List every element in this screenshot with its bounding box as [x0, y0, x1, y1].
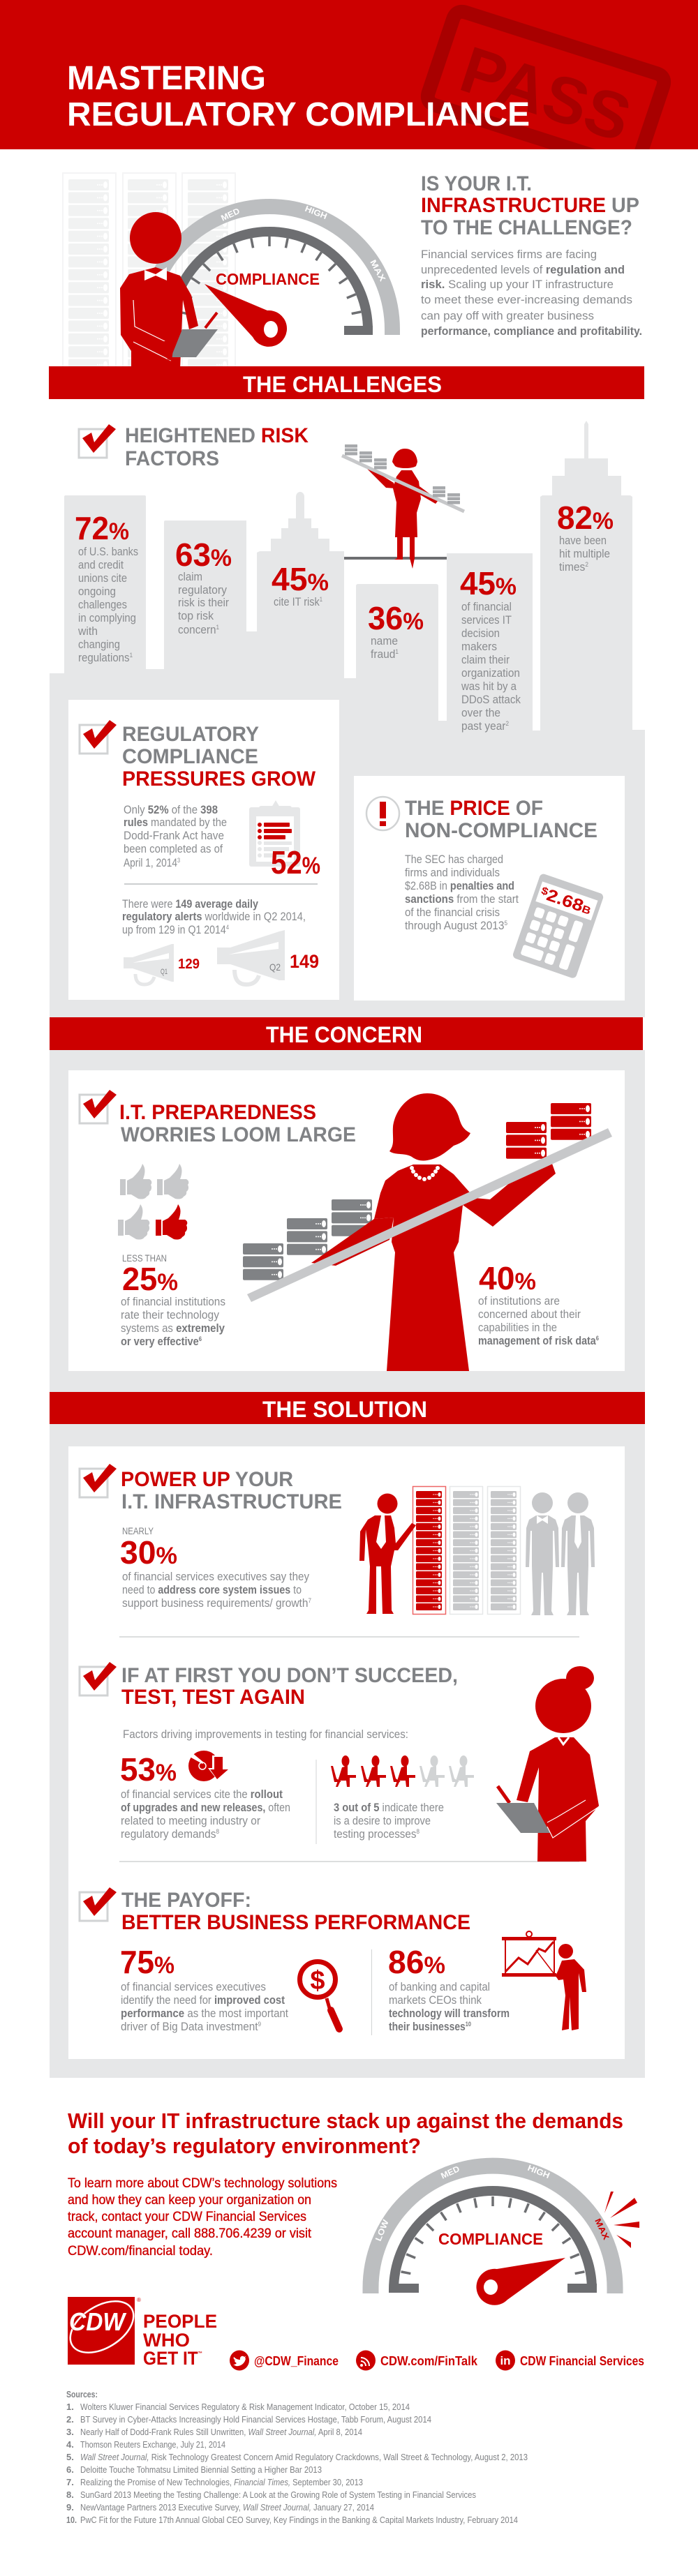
call to action text: account manager, call 888.706.4239 or visit: [68, 2226, 312, 2241]
icon: exclamation: [366, 797, 399, 830]
stat: 52 percent: 52%: [271, 844, 320, 881]
stat: 82 percent: 2: [585, 561, 588, 568]
sources: Wolters Kluwer Financial Services Regulatory & Risk Management Indicator, October 15, 2014: [80, 2402, 410, 2412]
call to action heading: Will your IT infrastructure stack up against the demands: [68, 2109, 623, 2133]
stat: 45 percent DDoS: past year: [461, 719, 510, 733]
heading: IT preparedness: WORRIES LOOM LARGE: [121, 1123, 356, 1146]
heading: the price of non-compliance: THE PRICE OF: [405, 797, 543, 820]
text: dodd-frank rules: [124, 803, 227, 869]
stat: 129: 129: [178, 957, 200, 972]
stat: 86 percent: technology will transform: [389, 2007, 510, 2020]
tagline: [143, 2311, 217, 2369]
stat: 75 percent: 75%: [120, 1944, 174, 1980]
text: SEC charges: The SEC has charged: [405, 853, 503, 866]
panel: solution: [50, 1424, 645, 2078]
sources: 9.: [66, 2502, 74, 2513]
heading: the payoff: BETTER BUSINESS PERFORMANCE: [121, 1911, 470, 1934]
illustration: man pointing at server racks: [359, 1486, 595, 1615]
stat: 45 percent DDoS: 2: [505, 720, 509, 727]
compliance gauge: HIGH: [304, 204, 329, 221]
text: SEC charges: 5: [504, 920, 507, 927]
stat: 86 percent: of banking and capital: [389, 1980, 490, 1993]
faded server racks: [63, 173, 235, 375]
heading: heightened risk factors: [125, 424, 309, 470]
sources: Sources:: [66, 2389, 98, 2399]
title: MASTERING: [67, 60, 266, 97]
intro heading: IS YOUR I.T.: [421, 172, 532, 195]
stat: 75 percent: of financial services executives: [121, 1980, 266, 1993]
social: LinkedIn: CDW Financial Services: [520, 2354, 644, 2368]
stat: 40 percent: management of risk data: [478, 1334, 618, 1347]
stat: 53 percent: regulatory demands: [121, 1827, 225, 1841]
icon: magnifying glass with dollar: [300, 1962, 339, 2029]
panel: price of non-compliance: [354, 776, 625, 1001]
stat: 63 percent: [175, 537, 232, 636]
stat: 40 percent: capabilities in the: [478, 1321, 557, 1334]
icon: checkbox testing: [80, 1662, 117, 1695]
stat: 63 percent: claim: [178, 570, 202, 583]
text: dodd-frank rules: 3: [177, 857, 180, 864]
stat: 72 percent: and credit: [78, 558, 124, 571]
social: twitter: @CDW_Finance: [254, 2354, 339, 2368]
stat: 45 percent DDoS: of financial: [461, 600, 512, 613]
text: 3 out of 5: 8: [417, 1828, 419, 1835]
stat: 63 percent: regulatory: [178, 583, 227, 597]
stat: 72 percent: challenges: [78, 598, 127, 611]
tagline: PEOPLE: [143, 2311, 217, 2332]
heading: if at first you don't succeed: TEST, TEST AGAIN: [121, 1686, 305, 1709]
stat: 82 percent: 82%: [557, 500, 614, 536]
tagline: GET IT: [143, 2348, 204, 2369]
woman with clipboard: [496, 1666, 600, 1862]
text: SEC charges: through August 2013: [405, 919, 514, 932]
text: dodd-frank rules: April 1, 2014: [124, 856, 190, 869]
stat: 53 percent: 8: [216, 1828, 219, 1835]
heading: the payoff: [121, 1889, 470, 1934]
sources: 1.: [66, 2402, 74, 2412]
heading: if at first you don't succeed: IF AT FIRST YOU DON’T SUCCEED,: [121, 1664, 458, 1687]
stat: 40 percent: of institutions are: [478, 1294, 560, 1308]
sources: 3.: [66, 2427, 74, 2437]
woman balancing servers: [243, 1093, 612, 1371]
stat: 82 percent: [557, 500, 614, 574]
compliance gauge at max: MED: [439, 2164, 461, 2181]
icon: magnifying glass with dollar: $: [310, 1966, 325, 1995]
stat: 75 percent: performance as the most important: [121, 2007, 288, 2020]
heading: power up your IT infrastructure: [121, 1468, 342, 1513]
CDW logo: CDW: [69, 2307, 127, 2336]
stat: 72 percent: of U.S. banks: [78, 545, 138, 558]
city skyline background: [50, 421, 645, 1017]
sources: [66, 2389, 528, 2525]
call to action text: and how they can keep your organization on: [68, 2193, 311, 2208]
intro paragraph: risk. Scaling up your IT infrastructure: [421, 278, 614, 291]
sources: Deloitte Touche Tohmatsu Limited Biennial Setting a Higher Bar 2013: [80, 2464, 322, 2475]
stat: 82 percent: times: [559, 560, 588, 574]
sources: 6.: [66, 2464, 74, 2475]
heading: regulatory compliance pressures grow: REGULATORY: [122, 723, 259, 746]
stat: 40 percent: 40%: [479, 1260, 536, 1296]
stat: 75 percent: [120, 1944, 288, 2033]
heading: the price of non-compliance: [405, 797, 597, 842]
stat: 72 percent: regulations: [78, 651, 136, 664]
call to action text: [68, 2176, 337, 2259]
band: the challenges: [49, 366, 644, 399]
text: regulatory alerts: 4: [226, 924, 229, 931]
sources: 4.: [66, 2439, 74, 2450]
stat: 53 percent: of financial services cite the rollout: [121, 1788, 283, 1801]
stat: 72 percent: in complying: [78, 611, 136, 624]
compliance gauge: COMPLIANCE: [216, 270, 320, 288]
text: dodd-frank rules: Dodd-Frank Act have: [124, 829, 224, 842]
text: 3 out of 5: [334, 1801, 444, 1841]
sources: 7.: [66, 2477, 74, 2487]
social: RSS: CDW.com/FinTalk: [380, 2354, 478, 2368]
sources: BT Survey in Cyber-Attacks Increasingly Hold Financial Services Hostage, Tabb Forum, August 2014: [80, 2414, 431, 2425]
stat: 72 percent: unions cite: [78, 571, 127, 585]
compliance gauge: [147, 204, 392, 347]
stat: 45 percent IT risk: 1: [320, 596, 322, 603]
social: twitter: [230, 2350, 339, 2371]
call to action text: track, contact your CDW Financial Services: [68, 2210, 306, 2224]
stat: 72 percent: [75, 510, 138, 664]
call to action text: CDW.com/financial today.: [68, 2244, 213, 2259]
intro heading line 2: INFRASTRUCTURE UP: [421, 194, 639, 217]
stat: 82 percent: hit multiple: [559, 547, 610, 560]
header banner: [0, 0, 698, 149]
sources: Wall Street Journal, Risk Technology Greatest Concern Amid Regulatory Crackdowns, Wall Street & Technology, August 2, 2013: [80, 2452, 528, 2462]
call to action heading: [68, 2109, 623, 2158]
social: LinkedIn: [496, 2350, 644, 2371]
text: SEC charges: sanctions from the start: [405, 892, 519, 906]
text: regulatory alerts: up from 129 in Q1 2014: [122, 923, 247, 936]
band: the concern: THE CONCERN: [266, 1022, 422, 1047]
tagline: WHO: [143, 2330, 190, 2351]
sources: 10.: [66, 2515, 77, 2525]
stat: 86 percent: 86%: [388, 1944, 445, 1980]
stat: less than 25 percent: rate their technology: [121, 1308, 219, 1321]
icon: calculator with $2.68B: B: [580, 903, 593, 918]
stat: 86 percent: markets CEOs think: [389, 1993, 482, 2007]
tightrope woman balancing servers: [342, 444, 464, 569]
text: SEC charges: $2.68B in penalties and: [405, 879, 514, 892]
text: regulatory alerts: regulatory alerts worldwide in Q2 2014,: [122, 910, 306, 923]
stat: 149: 149: [290, 951, 319, 972]
stat: less than 25 percent: of financial institutions: [121, 1295, 225, 1308]
stat: nearly 30 percent: NEARLY: [122, 1525, 154, 1536]
intro paragraph: to meet these ever-increasing demands: [421, 293, 632, 306]
icon: megaphone Q2: [217, 930, 285, 984]
stat: 75 percent: driver of Big Data investment: [121, 2020, 273, 2033]
heading: heightened risk factors: FACTORS: [125, 447, 219, 470]
stat: 53 percent: 53%: [120, 1751, 177, 1788]
stat: less than 25 percent: 25%: [122, 1261, 178, 1297]
text: regulatory alerts: There were 149 average daily: [122, 897, 258, 911]
band: the challenges: THE CHALLENGES: [243, 372, 442, 397]
sources: NewVantage Partners 2013 Executive Survey, Wall Street Journal, January 27, 2014: [80, 2502, 374, 2513]
social: LinkedIn: in: [500, 2354, 511, 2367]
text: factors: Factors driving improvements in testing for financial services:: [123, 1728, 408, 1741]
stat: nearly 30 percent: need to address core system issues to: [122, 1583, 302, 1596]
stat: 45 percent DDoS: [460, 565, 521, 733]
stat: 72 percent: with: [77, 624, 98, 638]
sources: Realizing the Promise of New Technologies, Financial Times, September 30, 2013: [80, 2477, 363, 2487]
PASS stamp: [428, 12, 664, 167]
icon: checkbox regulatory: [80, 720, 117, 754]
stat: 45 percent DDoS: over the: [461, 706, 500, 719]
intro paragraph: performance, compliance and profitability.: [421, 324, 642, 338]
stat: 45 percent DDoS: 45%: [460, 565, 517, 601]
stat: 45 percent DDoS: services IT: [461, 613, 512, 627]
icon: thumbs up ratings: [118, 1164, 188, 1240]
stat: 36 percent: [368, 600, 424, 661]
heading: heightened risk factors: HEIGHTENED RISK: [125, 424, 309, 447]
icon: calculator with $2.68B: 2.68: [544, 885, 586, 915]
sources: PwC Fit for the Future 17th Annual Global CEO Survey, Key Findings in the Banking & Capital Markets Industry, February 2014: [80, 2515, 518, 2525]
tagline: ™: [198, 2351, 202, 2356]
stat: 40 percent: concerned about their: [478, 1308, 581, 1321]
heading: the payoff: THE PAYOFF:: [121, 1889, 251, 1912]
icon: checkbox heightened risk: [79, 424, 116, 458]
sources: 8.: [66, 2489, 74, 2500]
sources: Nearly Half of Dodd-Frank Rules Still Unwritten, Wall Street Journal, April 8, 2014: [80, 2427, 362, 2437]
stat: 86 percent: [388, 1944, 510, 2033]
icon: calculator with $2.68B: [512, 873, 604, 979]
panel: regulatory compliance pressures: [68, 700, 339, 1000]
stat: 40 percent: [478, 1260, 599, 1347]
stat: 72 percent: ongoing: [78, 585, 116, 598]
compliance gauge: MED: [219, 206, 242, 223]
icon: checkbox preparedness: [80, 1090, 117, 1123]
stat: less than 25 percent: LESS THAN: [122, 1252, 167, 1264]
intro paragraph: unprecedented levels of regulation and: [421, 263, 625, 276]
sources: 5.: [66, 2452, 74, 2462]
heading: IT preparedness: I.T. PREPAREDNESS: [119, 1101, 316, 1124]
icon: megaphone Q1: [124, 944, 174, 984]
call to action text: To learn more about CDW’s technology solutions: [68, 2176, 337, 2191]
compliance gauge at max: MAX: [593, 2217, 611, 2241]
text: dodd-frank rules: rules mandated by the: [124, 816, 227, 829]
icon: man presenting chart: [502, 1931, 586, 2030]
stat: 63 percent: top risk: [178, 609, 214, 622]
title: [67, 60, 530, 133]
icon: clipboard checklist: [249, 800, 300, 867]
stat: 45 percent IT risk: 45%: [272, 561, 329, 597]
stat: 53 percent: [120, 1751, 290, 1841]
stat: 45 percent DDoS: organization: [461, 666, 520, 680]
text: 3 out of 5: 3 out of 5 indicate there: [334, 1801, 444, 1814]
stat: 36 percent: 1: [395, 648, 399, 655]
icon: disc with download arrow: [188, 1751, 230, 1781]
CDW logo: ®: [137, 2297, 141, 2303]
stat: 53 percent: of upgrades and new releases, often: [121, 1801, 290, 1814]
text: SEC charges: firms and individuals: [405, 866, 500, 879]
heading: power up your IT infrastructure: I.T. INFRASTRUCTURE: [121, 1490, 342, 1513]
intro paragraph: Financial services firms are facing: [421, 248, 597, 261]
heading: regulatory compliance pressures grow: COMPLIANCE: [122, 745, 258, 768]
intro paragraph: can pay off with greater business: [421, 309, 594, 322]
icon: five desk workers, three red: [331, 1755, 474, 1787]
heading: regulatory compliance pressures grow: [122, 723, 316, 791]
icon: calculator with $2.68B: $: [540, 885, 550, 899]
stat: less than 25 percent: [121, 1252, 225, 1348]
stat: 45 percent DDoS: decision: [461, 627, 500, 640]
stat: 36 percent: fraud: [371, 647, 398, 661]
stat: 72 percent: 72%: [75, 510, 129, 546]
stat: 45 percent DDoS: makers: [461, 640, 497, 653]
stat: nearly 30 percent: [120, 1525, 311, 1610]
heading: power up your IT infrastructure: POWER UP YOUR: [121, 1468, 293, 1491]
text: 3 out of 5: testing processes: [334, 1827, 426, 1841]
icon: megaphone Q1: Q1: [161, 968, 168, 976]
compliance gauge at max: LOW: [373, 2218, 391, 2242]
stat: 75 percent: identify the need for improved cost: [121, 1993, 285, 2007]
PASS stamp: PASS: [452, 32, 639, 156]
stat: 53 percent: related to meeting industry or: [121, 1814, 260, 1827]
sources: Thomson Reuters Exchange, July 21, 2014: [80, 2439, 225, 2450]
icon: checkbox payoff: [80, 1887, 117, 1921]
intro heading line 3: TO THE CHALLENGE?: [421, 216, 632, 239]
stat: less than 25 percent: or very effective: [121, 1335, 211, 1348]
stat: nearly 30 percent: support business requirements/ growth: [122, 1596, 327, 1610]
social: RSS: [356, 2350, 478, 2371]
band: the concern: [50, 1017, 643, 1050]
title: REGULATORY COMPLIANCE: [67, 96, 530, 133]
band: the solution: [50, 1392, 645, 1424]
stat: 45 percent DDoS: claim their: [461, 653, 510, 666]
CDW logo: [61, 2291, 142, 2365]
stat: 36 percent: name: [371, 634, 398, 647]
stat: 40 percent: 6: [596, 1335, 599, 1342]
man with clipboard: [120, 212, 218, 370]
stat: 63 percent: 1: [216, 624, 219, 631]
compliance gauge at max: HIGH: [526, 2163, 551, 2180]
heading: if at first you don't succeed: [121, 1664, 458, 1709]
heading: IT preparedness: [119, 1101, 356, 1146]
text: dodd-frank rules: Only 52% of the 398: [124, 803, 218, 816]
stat: 86 percent: their businesses: [389, 2020, 482, 2033]
stat: 63 percent: concern: [178, 623, 220, 636]
stat: 63 percent: risk is their: [178, 596, 229, 609]
panel: concern: [50, 1050, 645, 1392]
text: dodd-frank rules: been completed as of: [124, 842, 223, 855]
stat: 86 percent: 10: [466, 2021, 471, 2028]
sources: SunGard 2013 Meeting the Testing Challenge: A Look at the Growing Role of System Testing in Financial Services: [80, 2489, 476, 2500]
compliance gauge at max: COMPLIANCE: [438, 2230, 543, 2248]
stat: 45 percent DDoS: was hit by a: [461, 680, 517, 693]
stat: nearly 30 percent: 30%: [120, 1534, 177, 1571]
text: SEC charges: [405, 853, 519, 932]
stat: nearly 30 percent: 7: [308, 1597, 311, 1604]
intro paragraph: [421, 248, 642, 338]
heading: the price of non-compliance: NON-COMPLIANCE: [405, 819, 597, 842]
stat: 63 percent: 63%: [175, 537, 232, 573]
stat: 36 percent: 36%: [368, 600, 424, 636]
sources: 2.: [66, 2414, 74, 2425]
stat: 72 percent: changing: [78, 638, 120, 651]
stat: 45 percent IT risk: cite IT risk: [274, 595, 327, 608]
compliance gauge: MAX: [368, 258, 387, 283]
stat: less than 25 percent: systems as extremely: [121, 1321, 225, 1335]
stat: 82 percent: have been: [559, 534, 607, 547]
text: regulatory alerts: [122, 897, 306, 936]
icon: megaphone Q2: Q2: [269, 961, 281, 973]
compliance gauge at max: [371, 2163, 639, 2305]
stat: less than 25 percent: 6: [199, 1335, 202, 1342]
intro illustration: [63, 173, 392, 375]
stat: nearly 30 percent: of financial services executives say they: [122, 1570, 309, 1583]
stat: 45 percent DDoS: DDoS attack: [461, 693, 521, 706]
call to action heading: of today’s regulatory environment?: [68, 2134, 421, 2158]
icon: checkbox power up: [80, 1464, 117, 1497]
text: 3 out of 5: is a desire to improve: [334, 1814, 431, 1827]
text: SEC charges: of the financial crisis: [405, 906, 500, 919]
band: the solution: THE SOLUTION: [262, 1397, 427, 1422]
heading: regulatory compliance pressures grow: PRESSURES GROW: [122, 767, 316, 791]
stat: 75 percent: 9: [258, 2021, 261, 2028]
stat: 72 percent: 1: [130, 652, 133, 659]
